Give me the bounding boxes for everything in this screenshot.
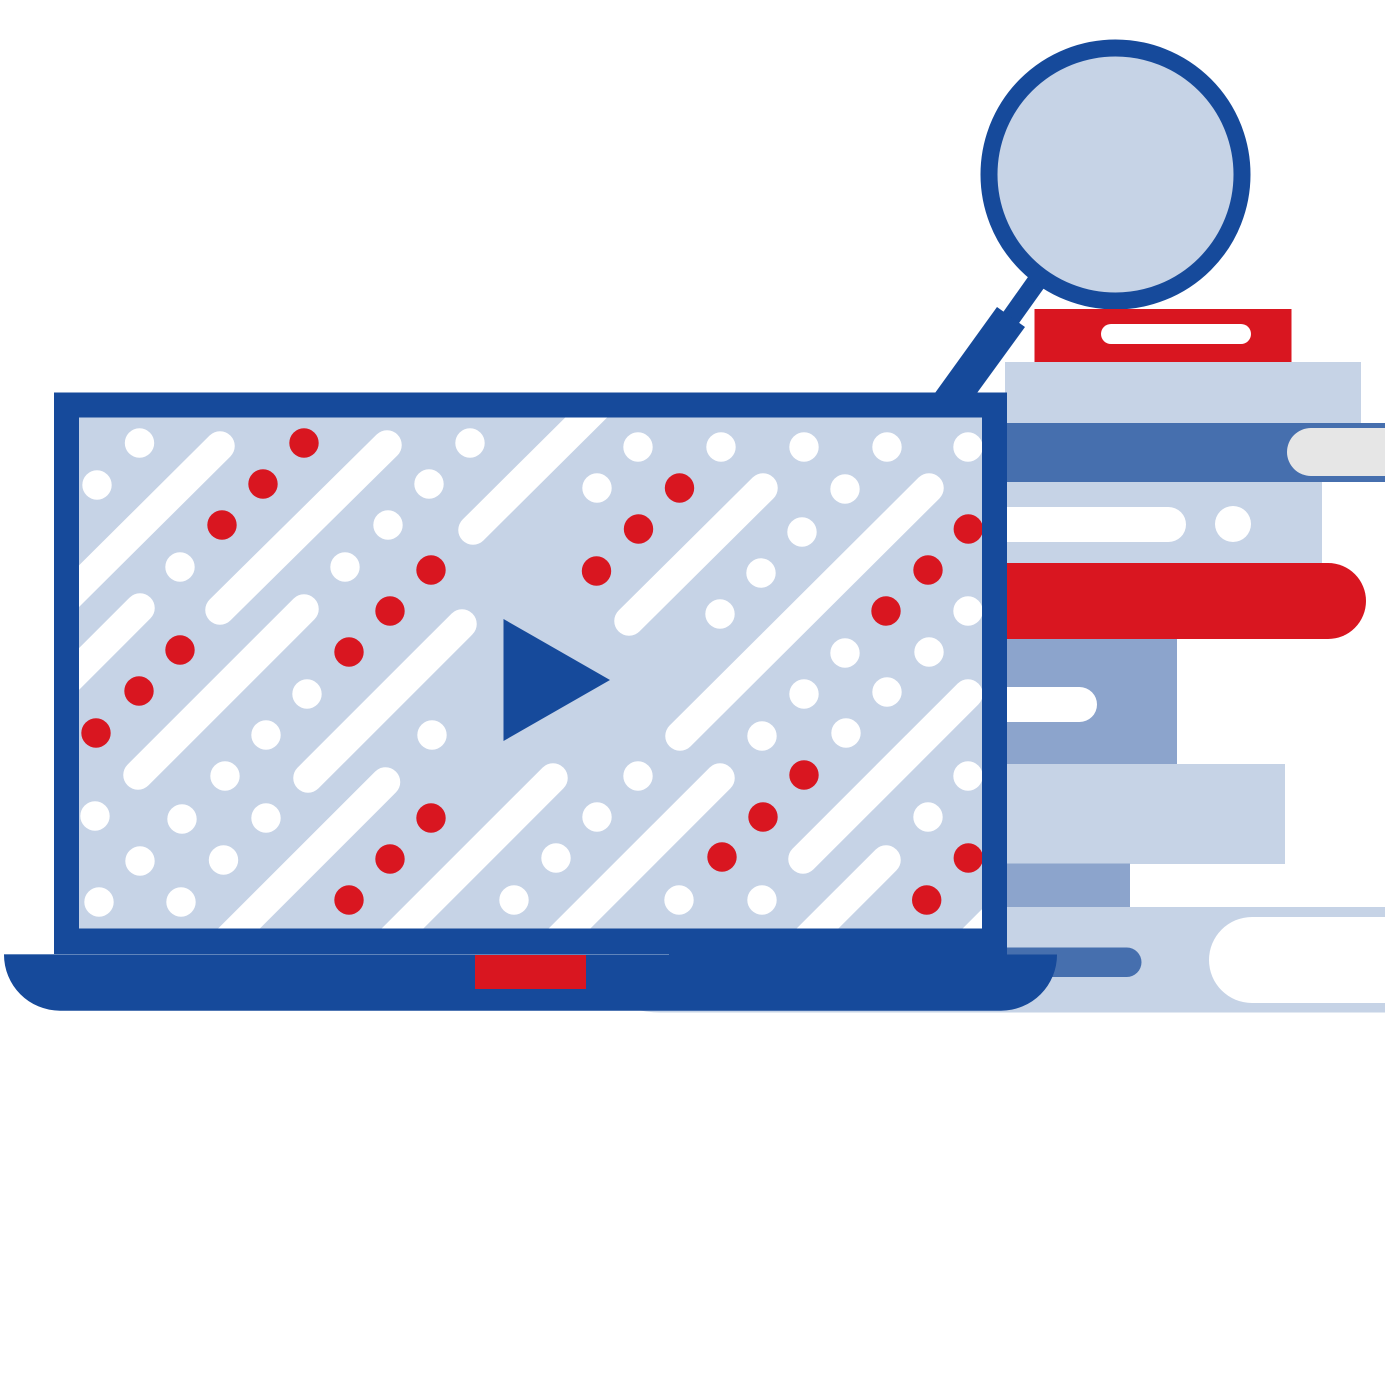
book: periwinkle with label [960,639,1177,764]
stack of books [625,309,1385,1012]
illustration [4,40,1385,1012]
book: red rounded [1007,563,1366,639]
book: red top [1034,309,1292,362]
icon: play button [504,619,610,741]
red dots [81,428,983,915]
icon: magnifying glass [935,48,1242,393]
book: bottom with pages [625,907,1385,1012]
laptop [4,371,1057,1011]
white diagonal stripes [79,418,982,928]
laptop screen frame [54,392,1007,954]
base highlight line [4,954,669,955]
laptop base [4,954,1057,1011]
book: periwinkle small [1007,864,1130,907]
book: light blue wide [1007,764,1285,864]
white dots [80,428,983,917]
laptop notch [475,955,586,989]
book: light blue with label [960,482,1322,563]
book: mid blue with pages [1007,423,1385,482]
video screen pattern [79,418,982,928]
book: light blue top [1005,362,1361,423]
